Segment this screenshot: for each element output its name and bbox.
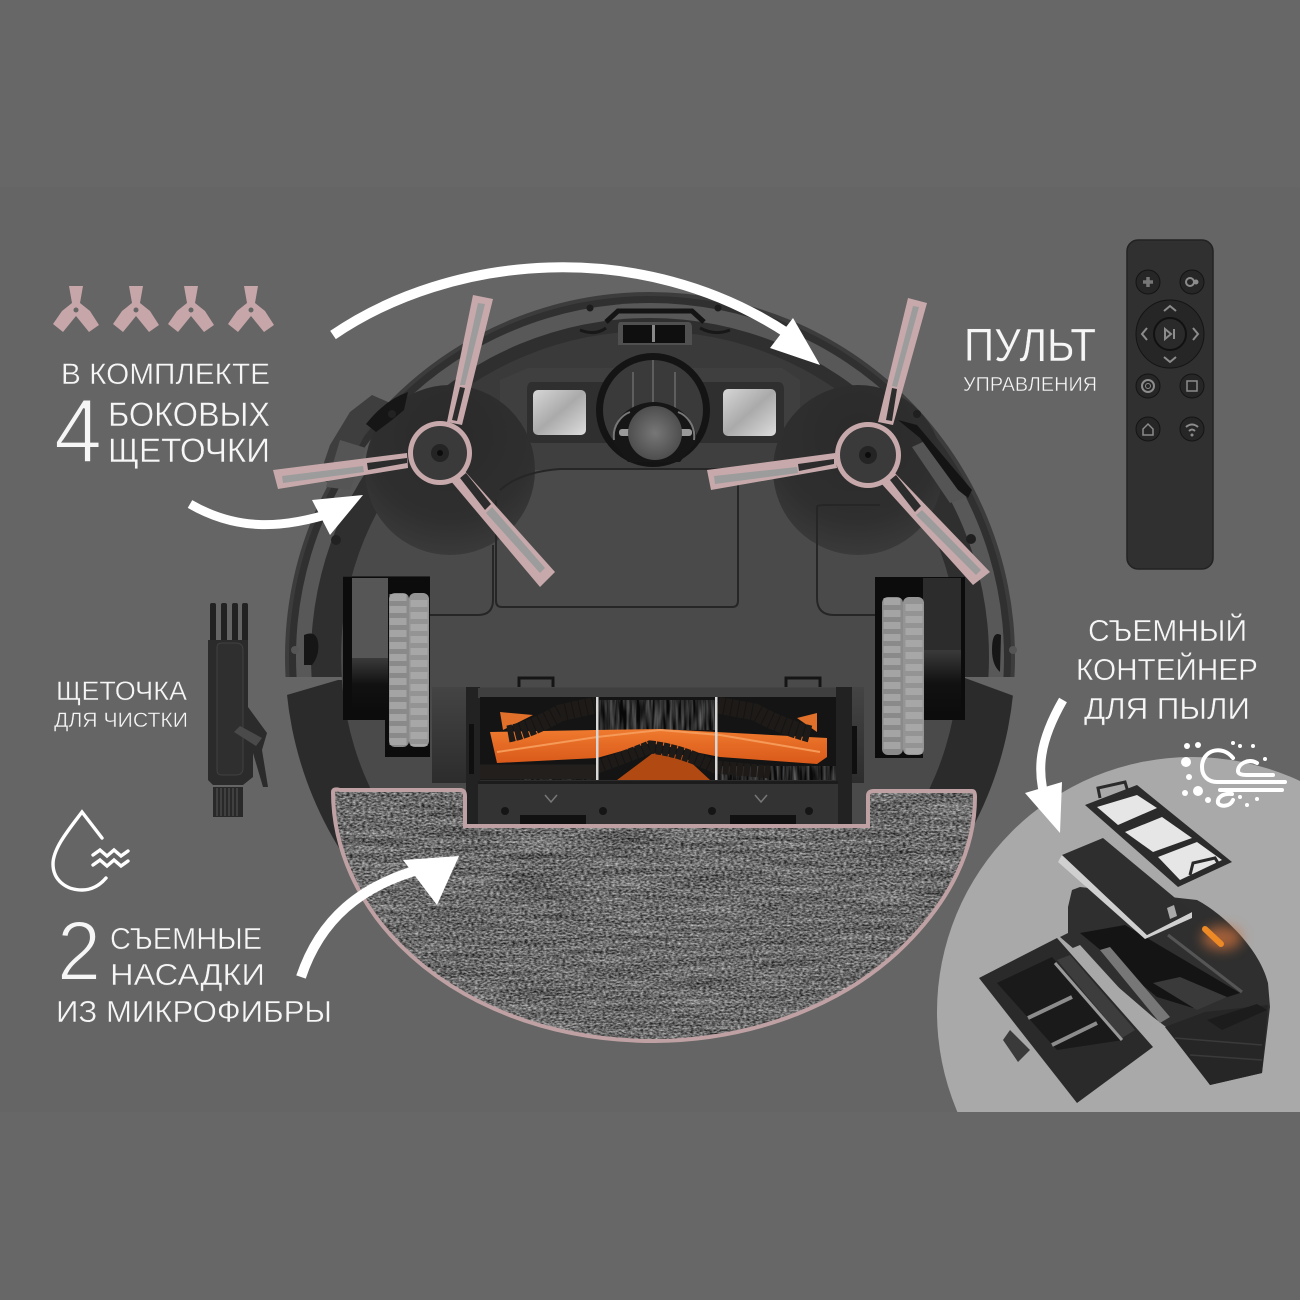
open lid xyxy=(979,938,1153,1103)
bottom plate xyxy=(341,470,952,824)
text: cleaning brush: ДЛЯ ЧИСТКИ xyxy=(54,709,188,732)
sensor window left xyxy=(533,390,586,435)
text: side brushes: 4 xyxy=(54,381,102,482)
robot lower body xyxy=(287,678,1013,848)
text: remote: ПУЛЬТ xyxy=(964,319,1096,371)
icon: brush 3 xyxy=(168,286,214,332)
brush handle xyxy=(208,640,268,787)
text: cleaning brush xyxy=(54,676,188,732)
cleaning brush tool xyxy=(208,603,268,817)
text: mop pads: ИЗ МИКРОФИБРЫ xyxy=(56,994,332,1029)
text: side brushes xyxy=(54,358,270,482)
arrow: to mop pad xyxy=(301,856,459,977)
arm up xyxy=(878,298,927,425)
underside bay xyxy=(472,333,834,408)
side brush left xyxy=(273,295,555,587)
right drive wheel xyxy=(875,577,965,758)
brush teeth xyxy=(210,603,248,643)
sensor window right xyxy=(723,389,776,436)
sensor tray xyxy=(527,382,784,443)
main brush housing xyxy=(432,678,864,827)
hub xyxy=(835,422,901,488)
text: dust container: ДЛЯ ПЫЛИ xyxy=(1084,691,1250,726)
text: mop pads xyxy=(56,904,332,1029)
container body xyxy=(1060,887,1270,1085)
brush well left xyxy=(365,385,535,555)
top bay shading xyxy=(500,368,800,470)
foam filter xyxy=(1058,838,1192,939)
brush bristles xyxy=(213,787,243,817)
arm up xyxy=(447,295,493,425)
hub xyxy=(408,421,472,485)
arm left xyxy=(273,453,408,489)
left drive wheel xyxy=(343,577,430,757)
brush well right xyxy=(773,385,943,555)
arm left xyxy=(707,453,837,490)
bumper parts left xyxy=(291,392,408,665)
brushes icon row xyxy=(53,286,274,332)
text: mop pads: НАСАДКИ xyxy=(110,957,265,992)
main brush roller xyxy=(480,697,836,780)
bottom plate panels xyxy=(343,469,880,615)
text: cleaning brush: ЩЕТОЧКА xyxy=(56,676,187,706)
text: side brushes: ЩЕТОЧКИ xyxy=(108,432,270,470)
text: mop pads: СЪЕМНЫЕ xyxy=(110,921,262,956)
text: dust container: КОНТЕЙНЕР xyxy=(1076,651,1258,687)
robot vacuum underside xyxy=(285,292,1017,848)
hepa filter frame xyxy=(1085,782,1232,887)
side brush right xyxy=(707,298,990,585)
icon: water drop xyxy=(53,812,128,890)
remote control xyxy=(1127,240,1213,569)
hinge strips xyxy=(1068,945,1170,1037)
arrow: to dust container xyxy=(1025,700,1063,833)
bumper parts right xyxy=(898,410,1017,672)
text: side brushes: БОКОВЫХ xyxy=(108,396,270,434)
dust container exploded view xyxy=(979,782,1270,1103)
front caster wheel xyxy=(596,353,710,467)
text: side brushes: В КОМПЛЕКТЕ xyxy=(61,358,270,391)
arrow: top arc to right brush xyxy=(333,267,820,365)
arm right xyxy=(880,470,990,585)
icon: wind and dust xyxy=(1181,741,1285,807)
arrow: to left brush xyxy=(190,495,363,535)
text: mop pads: 2 xyxy=(57,904,101,998)
text: remote: УПРАВЛЕНИЯ xyxy=(963,374,1097,396)
text: remote xyxy=(963,319,1097,396)
text: dust container xyxy=(1076,612,1258,726)
icon: brush 4 xyxy=(228,286,274,332)
front sensor xyxy=(580,304,730,345)
central band xyxy=(0,187,1300,1112)
robot upper shell xyxy=(285,292,1015,677)
arm right xyxy=(450,468,555,587)
icon: brush 2 xyxy=(113,286,159,332)
orange indicator xyxy=(1202,926,1242,950)
remote buttons xyxy=(1136,270,1204,441)
icon: brush 1 xyxy=(53,286,99,332)
grey circle behind dust container xyxy=(937,757,1300,1112)
microfiber mop pad xyxy=(325,785,980,1045)
text: dust container: СЪЕМНЫЙ xyxy=(1088,612,1247,648)
